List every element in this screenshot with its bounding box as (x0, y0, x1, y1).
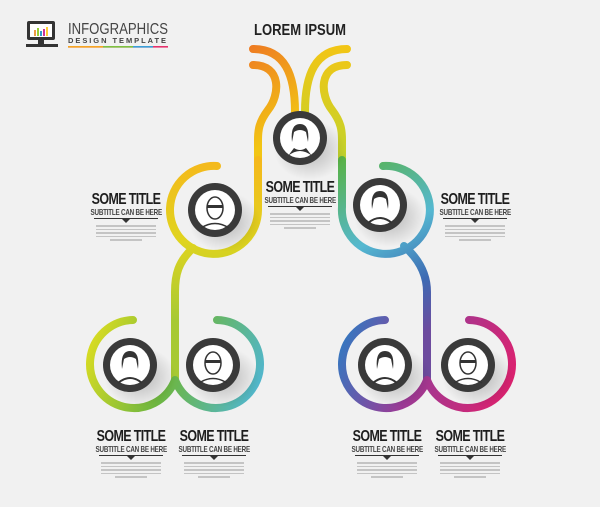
avatars (103, 111, 514, 407)
text block: bottom 3: SUBTITLE CAN BE HERE (351, 444, 423, 454)
text block: center: SUBTITLE CAN BE HERE (264, 195, 336, 205)
text block: upper right: SOME TITLE (441, 191, 509, 208)
text block: bottom 1: SUBTITLE CAN BE HERE (95, 444, 167, 454)
text block: upper left: SUBTITLE CAN BE HERE (90, 207, 162, 217)
text block: bottom 3 (351, 428, 423, 478)
text block: bottom 4: SUBTITLE CAN BE HERE (434, 444, 506, 454)
text block: bottom 2: SUBTITLE CAN BE HERE (178, 444, 250, 454)
text block: center: SOME TITLE (266, 179, 334, 196)
text block: bottom 1: SOME TITLE (97, 428, 165, 445)
text block: center (264, 179, 336, 229)
text block: bottom 4 (434, 428, 506, 478)
tree lines (90, 49, 512, 408)
header logo icon (26, 21, 58, 47)
text block: upper left (90, 191, 162, 241)
text block: upper left: SOME TITLE (92, 191, 160, 208)
header text: DESIGN TEMPLATE (68, 36, 168, 45)
header text (68, 21, 168, 48)
title: LOREM IPSUM (254, 22, 346, 39)
text block: bottom 4: SOME TITLE (436, 428, 504, 445)
text block: upper right: SUBTITLE CAN BE HERE (439, 207, 511, 217)
text block: bottom 3: SOME TITLE (353, 428, 421, 445)
text block: bottom 2 (178, 428, 250, 478)
text block: bottom 2: SOME TITLE (180, 428, 248, 445)
text block: upper right (439, 191, 511, 241)
header text: INFOGRAPHICS (68, 21, 168, 38)
text block: bottom 1 (95, 428, 167, 478)
